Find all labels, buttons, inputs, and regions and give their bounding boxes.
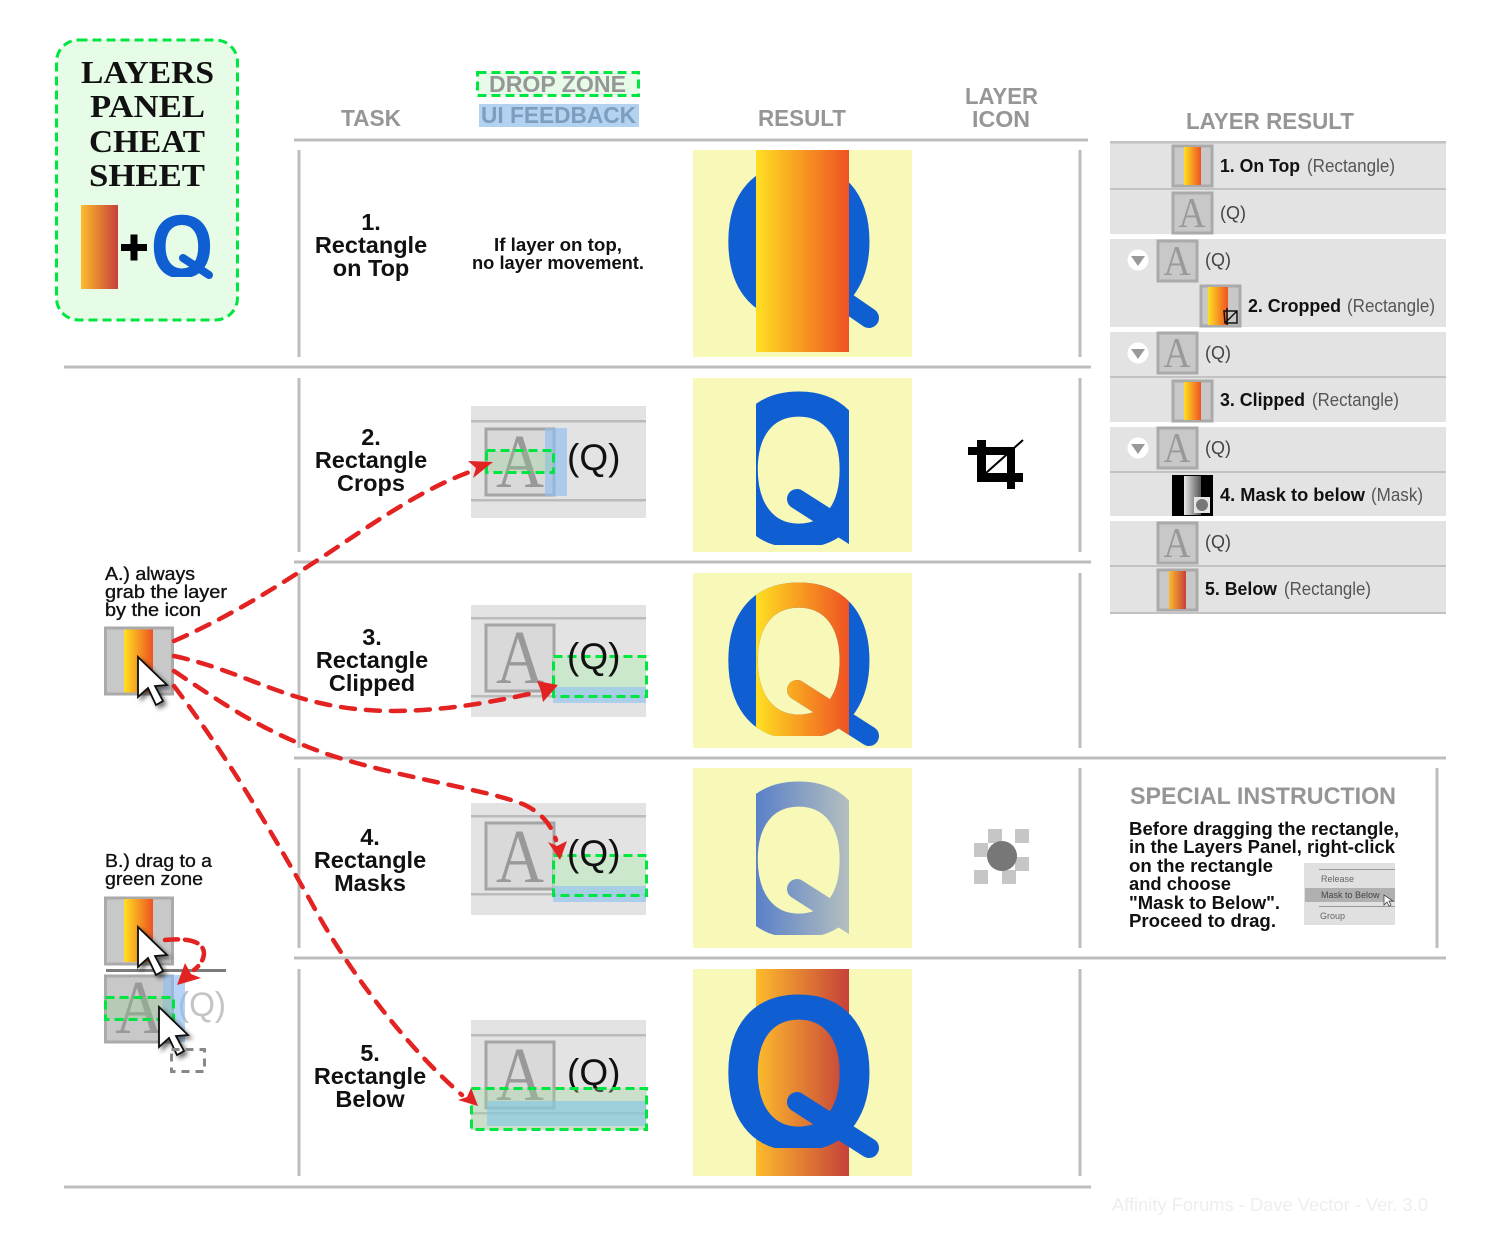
column headers: LAYER RESULT (1186, 108, 1354, 134)
task labels: Rectangle (315, 232, 427, 258)
ui panel 2: crops: (Q) (567, 437, 620, 478)
row 2 cropped: (Rectangle) (1347, 296, 1435, 316)
layer thumbnail being grabbed (106, 628, 172, 694)
row 3 clipped (1173, 381, 1399, 421)
layer result panel (1110, 141, 1446, 614)
row Q: (Q) (1205, 532, 1231, 552)
row 2 cropped (1201, 286, 1435, 326)
drag demo: (Q) (178, 986, 226, 1024)
result 1: rectangle on top: Q (720, 118, 878, 366)
task labels: Rectangle (315, 447, 427, 473)
task labels: 3. (362, 624, 382, 650)
ui panel 3: clipped: A (496, 616, 544, 700)
note: no layer movement: no layer movement. (472, 253, 644, 273)
ui panel 4: masks (471, 803, 646, 915)
result 3: clipped: Q (720, 538, 878, 786)
task labels: on Top (333, 255, 409, 281)
instruction body: Proceed to drag. (1129, 910, 1276, 931)
context menu: Mask to Below (1321, 890, 1380, 900)
drag demo divider (106, 969, 226, 972)
task labels: 1. (361, 209, 381, 235)
row Q expanded: A (1164, 239, 1191, 285)
column headers: LAYER (965, 83, 1038, 109)
result 4: masked (693, 768, 912, 948)
arrow: to clip zone (174, 656, 558, 711)
ui panel 5: below: A (496, 1033, 544, 1117)
task labels: Rectangle (314, 847, 426, 873)
row 1 on top: (Rectangle) (1307, 156, 1395, 176)
row Q expanded (1128, 426, 1231, 472)
note: no layer movement: If layer on top, (494, 235, 622, 255)
row 3 clipped: 3. Clipped (1220, 390, 1305, 410)
instruction A: by the icon (105, 599, 201, 620)
row 1 on top: 1. On Top (1220, 156, 1300, 176)
title text: LAYERS (81, 54, 214, 90)
task labels: Below (335, 1086, 405, 1112)
row Q (1158, 521, 1231, 567)
row 5 below (1158, 570, 1371, 610)
ui panel 4: masks: (Q) (567, 833, 620, 874)
arrow: to below zone (174, 686, 478, 1106)
ui panel 4: masks: A (496, 815, 544, 899)
cursor: bottom (159, 1007, 188, 1055)
rectangle plus Q emblem: Q (150, 198, 214, 298)
title text: CHEAT (89, 123, 205, 159)
result 2: cropped: Q (720, 346, 878, 594)
result 4: masked: Q (720, 736, 878, 984)
row Q: (Q) (1220, 203, 1246, 223)
ui panel 2: crops (471, 406, 646, 518)
row Q (1173, 191, 1246, 237)
task labels: Clipped (329, 670, 415, 696)
instruction body (1129, 818, 1399, 931)
row 2 cropped: 2. Cropped (1248, 296, 1341, 316)
result 1: rectangle on top (693, 150, 912, 357)
result 5: below (693, 969, 912, 1176)
drag demo (106, 898, 226, 1072)
row 3 clipped: (Rectangle) (1312, 390, 1399, 410)
task labels: Rectangle (314, 1063, 426, 1089)
row Q expanded: (Q) (1205, 343, 1231, 363)
context menu: Group (1320, 911, 1345, 921)
icon: mask (974, 829, 1029, 884)
instruction A: grab the layer (105, 581, 227, 602)
arrow: to mask zone (174, 671, 567, 860)
task labels: 5. (360, 1040, 380, 1066)
row Q expanded: A (1164, 331, 1191, 377)
task labels: Crops (337, 470, 405, 496)
task labels: 2. (361, 424, 381, 450)
cursor: top (138, 927, 167, 975)
row Q expanded: A (1164, 426, 1191, 472)
task labels: Rectangle (316, 647, 428, 673)
instruction body: Before dragging the rectangle, (1129, 818, 1399, 839)
note: no layer movement (472, 235, 644, 273)
ui panel 5: below: (Q) (567, 1052, 620, 1093)
instruction body: and choose (1129, 873, 1231, 894)
row 4 mask: (Mask) (1371, 485, 1423, 505)
row 5 below: 5. Below (1205, 579, 1278, 599)
result 2: cropped (693, 378, 912, 552)
instruction B (105, 850, 213, 889)
row 4 mask (1172, 475, 1423, 516)
ui feedback legend: UI FEEDBACK (481, 102, 636, 128)
title text (81, 54, 214, 193)
result 5: below: Q (720, 950, 878, 1198)
column headers (341, 71, 1354, 134)
ui panel 2: crops: A (496, 420, 544, 504)
rectangle plus Q emblem (81, 205, 213, 289)
credit: Affinity Forums - Dave Vector - Ver. 3.0 (1112, 1195, 1428, 1215)
row Q expanded (1128, 239, 1231, 285)
instruction A: A.) always (105, 563, 195, 584)
row 4 mask: 4. Mask to below (1220, 485, 1366, 505)
row Q: A (1164, 521, 1191, 567)
instruction body: on the rectangle (1129, 855, 1273, 876)
row Q expanded: (Q) (1205, 250, 1231, 270)
row Q expanded: (Q) (1205, 438, 1231, 458)
dashed drop outline (172, 1050, 204, 1072)
arrow: to crop zone (174, 461, 493, 641)
column headers: ICON (972, 106, 1030, 132)
row Q expanded (1128, 331, 1231, 377)
drag demo: A (115, 966, 163, 1050)
ui panel 5: below (471, 1020, 647, 1130)
instruction body: in the Layers Panel, right-click (1129, 836, 1396, 857)
instruction body: "Mask to Below". (1129, 892, 1280, 913)
task labels (314, 209, 428, 1112)
context menu: Release (1321, 874, 1354, 884)
ui panel 3: clipped (471, 605, 646, 717)
column headers: TASK (341, 105, 401, 131)
title text: PANEL (90, 88, 205, 124)
row 1 on top (1173, 146, 1395, 186)
special instruction: SPECIAL INSTRUCTION (1130, 783, 1396, 810)
title card (56, 40, 238, 320)
row 5 below: (Rectangle) (1284, 579, 1371, 599)
short curved arrow (165, 939, 204, 985)
instruction B: B.) drag to a (105, 850, 213, 871)
column headers: RESULT (758, 105, 846, 131)
row Q: A (1178, 191, 1206, 237)
title text: SHEET (89, 157, 205, 193)
task labels: 4. (360, 824, 380, 850)
drop zone legend: DROP ZONE (489, 71, 626, 97)
result 3: clipped (693, 573, 912, 748)
icon: crop (968, 440, 1023, 489)
result 3: clipped: Q (720, 538, 878, 786)
instruction B: green zone (105, 868, 203, 889)
context menu (1304, 863, 1395, 925)
instruction A (105, 563, 227, 620)
cursor: grab (138, 657, 167, 705)
special instruction (1129, 783, 1399, 931)
ui panel 3: clipped: (Q) (567, 636, 620, 677)
task labels: Masks (334, 870, 406, 896)
